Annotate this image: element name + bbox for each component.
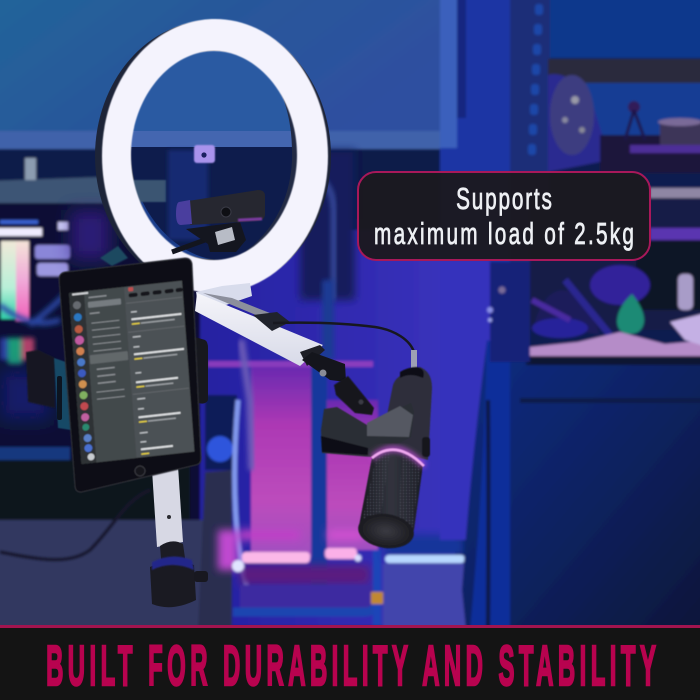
view through ring: screen band [131, 131, 298, 147]
webcam clamp silver front [215, 227, 235, 245]
background: dark middle shelf [530, 198, 700, 330]
mic grille dots right [398, 450, 421, 538]
ring light dark back rim [95, 20, 331, 292]
ring light [95, 20, 331, 292]
background: PC case dark blue glow [0, 370, 50, 420]
ring light glowing tube [102, 19, 328, 293]
clamp knob [194, 571, 208, 582]
background: pink horizontal rail [208, 361, 373, 367]
tablet body [59, 258, 201, 492]
channel panel [84, 287, 136, 462]
mic upper right side button [422, 437, 430, 457]
background: small white light [232, 560, 244, 572]
background: blue wall right upper [545, 0, 700, 58]
mic grille body [359, 450, 423, 540]
background: cabinet dark fold [520, 398, 700, 403]
messages [126, 297, 193, 455]
background: screen edge on column [440, 0, 457, 148]
background: dark strip on column [457, 0, 466, 118]
left teal holder [54, 358, 71, 430]
background: bright pink light bar left [242, 552, 310, 563]
extension arm [195, 293, 346, 382]
webcam end cap [176, 200, 192, 225]
background: orange joint [371, 592, 383, 604]
screen background [69, 281, 194, 464]
background: bright pink light bar right [325, 548, 357, 559]
view through ring: dark panel stripes [168, 150, 208, 240]
background: rack upright [510, 0, 550, 290]
webcam pink base line [238, 217, 262, 222]
background: pale object right [670, 312, 700, 348]
microphone cable [273, 323, 414, 352]
background: shelf dark lip [526, 356, 700, 365]
callout text line 2: maximum load of 2.5kg [374, 216, 634, 251]
mic end cap [356, 510, 416, 552]
background: carpet and desk surface [0, 520, 212, 630]
view through ring: upper wall [131, 51, 297, 131]
background: dark stand leg behind tablet [205, 395, 237, 470]
arm white bar [195, 293, 323, 366]
mic pink glow [372, 449, 424, 466]
server sidebar [69, 291, 96, 464]
background: navy cabinet with curtain [462, 340, 700, 630]
background: white frame curve [235, 400, 255, 608]
channel list lines lower [95, 366, 125, 400]
background: curtain edge [470, 340, 510, 630]
webcam body [188, 190, 265, 225]
arm pole below tablet [150, 466, 208, 607]
left ball head behind tablet [100, 246, 128, 266]
background: LED strip [385, 555, 465, 563]
background: pink floor glow [218, 530, 370, 585]
arm top silver rail [203, 293, 285, 323]
callout box [358, 172, 650, 260]
mic pink ring [372, 450, 424, 466]
footer background [0, 625, 700, 700]
background: PC cables blue [0, 290, 70, 325]
background: green bottle [617, 294, 644, 334]
channel header button [88, 298, 121, 308]
background: dark blue centre column [300, 150, 355, 300]
background: curtain dark fold [486, 400, 490, 630]
channel list lines [88, 294, 121, 352]
arm threaded connector [302, 352, 346, 382]
background: pale shelf edge [650, 188, 700, 198]
background: dark LED strip base [385, 535, 465, 557]
footer top line [0, 625, 700, 628]
background: blue wall behind shelf objects [545, 80, 700, 160]
pole body [152, 466, 183, 547]
background: dark computer area [0, 203, 200, 523]
server icons [72, 301, 93, 453]
background: objects on lower shelf [532, 265, 650, 338]
background: RGB memory sticks [1, 241, 29, 321]
ring inner dark rim on right [232, 60, 300, 260]
background: white bottle [678, 274, 693, 310]
footer headline: BUILT FOR DURABILITY AND STABILITY [46, 634, 656, 698]
mic ball arm screw [358, 400, 364, 404]
footer bar [0, 625, 700, 700]
background: pale stand pipe [322, 180, 334, 300]
mic grille dots left [362, 450, 390, 530]
background: blue pole with orange joint [373, 550, 381, 626]
callout text line 1: Supports [456, 181, 552, 216]
background: PC blue light strip [0, 220, 38, 224]
background: PC white light strip [0, 228, 42, 236]
background: blue base frame [233, 600, 378, 612]
background: floor right [383, 563, 468, 629]
microphone cable connector [411, 350, 417, 368]
background: shelf objects top [548, 74, 700, 173]
tabs row [129, 288, 183, 298]
mic ball arm [334, 376, 374, 415]
background: PC light bars [35, 222, 70, 276]
background webcam dot light in ring [194, 145, 215, 163]
arm rail clip [253, 312, 290, 331]
clamp base [150, 560, 196, 607]
background: lights on rack [487, 286, 506, 322]
background: cable on desk [0, 490, 150, 560]
background: purple floor [240, 585, 375, 611]
microphone [321, 367, 432, 552]
joint screw [320, 370, 326, 376]
left holder slot [57, 376, 62, 420]
callout [358, 172, 650, 260]
view through ring: dark lower area [131, 147, 298, 260]
background: centre purple wall [195, 230, 455, 626]
left holder black wrap [26, 350, 55, 408]
background: desk side shadow [198, 470, 232, 630]
background: pale shelf surface [528, 332, 700, 357]
background: left desk shelf [0, 177, 165, 203]
background: pink panels [251, 367, 378, 557]
pole screw hole [167, 515, 171, 519]
background: RGB reflection [0, 338, 34, 364]
background: top thin pole [322, 280, 334, 360]
webcam clamp arm [172, 236, 216, 252]
background: dark top shelf beam [548, 59, 700, 83]
mount clamp under ring [196, 283, 252, 305]
ring light inner opening [126, 46, 302, 264]
ring inner rim pink reflection [262, 62, 291, 98]
tablet holder clips [26, 337, 208, 430]
tablet screen [69, 281, 194, 464]
clip dark lower jaw [321, 436, 368, 455]
background: small white object on shelf [25, 158, 36, 180]
tablet [59, 258, 201, 492]
webcam clamp dark [186, 222, 246, 252]
clip light facet [367, 406, 413, 437]
tablet home button [135, 466, 145, 476]
background: small light dot [354, 554, 362, 562]
status bar [72, 292, 88, 296]
background: black drawer [0, 460, 190, 522]
background: upper right blue column [440, 0, 515, 290]
background: PC purple glow [70, 210, 110, 260]
background: rack lower post [490, 262, 530, 362]
pole joint [160, 541, 186, 570]
mic shock mount clip [321, 403, 414, 457]
view through ring: grey shelf piece [131, 180, 166, 202]
background: blue fan [207, 436, 233, 462]
user avatar [87, 453, 95, 461]
clamp base blue highlight [152, 556, 194, 570]
background: projector screen wall [0, 0, 462, 131]
mic upper body [380, 367, 432, 460]
webcam [172, 190, 265, 252]
background: lower column wall [440, 260, 490, 540]
background: screen bottom band [0, 131, 462, 149]
webcam lens [221, 207, 231, 217]
right dark holder [195, 337, 208, 404]
background: rack holes [528, 4, 543, 155]
header avatar [128, 287, 133, 292]
active channel [90, 351, 128, 364]
background: dark wall under screen [0, 149, 462, 219]
arm end socket [300, 345, 325, 366]
background: pale frame bar [241, 340, 252, 470]
mic cap [400, 367, 424, 378]
background: black box on shelf [636, 240, 700, 310]
background: dark blue vertical pole [311, 352, 327, 610]
dark dot in webcam light [201, 152, 207, 158]
background: under desk blue strip [0, 447, 70, 460]
background: purple bar on middle shelf [650, 228, 700, 240]
